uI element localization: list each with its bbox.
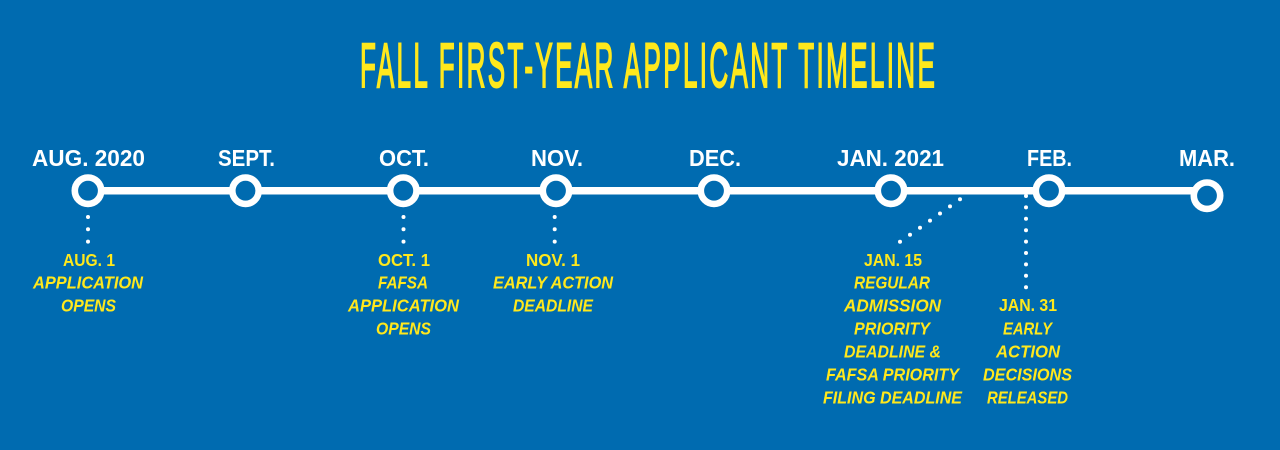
- month marker: Feb.: [1027, 145, 1072, 204]
- event: Aug. 1 application opens: AUG. 1: [63, 250, 115, 270]
- month marker: Feb.: FEB.: [1027, 145, 1072, 171]
- month marker: Jan. 2021: JAN. 2021: [837, 145, 944, 171]
- month marker: Nov.: [531, 145, 583, 204]
- month marker: Aug. 2020: [32, 145, 145, 204]
- event: Aug. 1 application opens: APPLICATION: [32, 272, 143, 292]
- event: Nov. 1 early action deadline: [493, 250, 613, 316]
- dotted connector: Nov. 1: [553, 215, 557, 244]
- event: Jan. 15 regular admission priority deadline: JAN. 15: [864, 250, 922, 270]
- dotted connector: Jan. 15: [898, 197, 962, 244]
- month marker: Aug. 2020: AUG. 2020: [32, 145, 145, 171]
- month marker: Oct.: [379, 145, 429, 204]
- event: Nov. 1 early action deadline: DEADLINE: [513, 296, 594, 316]
- title: FALL FIRST-YEAR APPLICANT TIMELINE: [360, 31, 935, 101]
- event: Jan. 15 regular admission priority deadline: DEADLINE &: [844, 342, 941, 362]
- timeline line: [88, 187, 1207, 194]
- event: Jan. 31 early action decisions released: JAN. 31: [999, 295, 1057, 315]
- event: Jan. 31 early action decisions released: EARLY: [1003, 318, 1053, 338]
- event: Oct. 1 FAFSA application opens: APPLICATION: [347, 296, 459, 316]
- event: Jan. 15 regular admission priority deadline: [823, 250, 963, 408]
- event: Jan. 15 regular admission priority deadline: REGULAR: [854, 272, 930, 292]
- event: Jan. 31 early action decisions released: RELEASED: [987, 388, 1068, 408]
- month marker: Sept.: SEPT.: [218, 145, 275, 171]
- event: Oct. 1 FAFSA application opens: FAFSA: [378, 272, 428, 292]
- month marker: Mar.: [1179, 145, 1235, 209]
- event: Jan. 15 regular admission priority deadline: FAFSA PRIORITY: [826, 364, 960, 384]
- event: Aug. 1 application opens: [32, 250, 143, 316]
- month marker: Mar.: MAR.: [1179, 145, 1235, 171]
- dotted connector: Oct. 1: [402, 215, 406, 244]
- month marker: Sept.: [218, 145, 275, 204]
- event: Oct. 1 FAFSA application opens: OPENS: [376, 318, 431, 338]
- month marker: Jan. 2021: [837, 145, 944, 204]
- event: Jan. 15 regular admission priority deadline: ADMISSION: [843, 296, 941, 316]
- event: Nov. 1 early action deadline: EARLY ACTION: [493, 272, 613, 292]
- event: Jan. 15 regular admission priority deadline: FILING DEADLINE: [823, 388, 963, 408]
- event: Jan. 31 early action decisions released: DECISIONS: [983, 364, 1072, 384]
- month marker: Dec.: [689, 145, 741, 204]
- event: Oct. 1 FAFSA application opens: OCT. 1: [378, 250, 430, 270]
- event: Oct. 1 FAFSA application opens: [347, 250, 459, 338]
- month marker: Dec.: DEC.: [689, 145, 741, 171]
- month marker: Oct.: OCT.: [379, 145, 429, 171]
- dotted connector: Aug. 1: [86, 215, 90, 244]
- event: Jan. 15 regular admission priority deadline: PRIORITY: [854, 318, 931, 338]
- dotted connector: Jan. 31: [1024, 194, 1028, 289]
- month marker: Nov.: NOV.: [531, 145, 583, 171]
- event: Aug. 1 application opens: OPENS: [61, 296, 116, 316]
- event: Jan. 31 early action decisions released: [983, 295, 1072, 408]
- event: Jan. 31 early action decisions released: ACTION: [995, 342, 1060, 362]
- event: Nov. 1 early action deadline: NOV. 1: [526, 250, 580, 270]
